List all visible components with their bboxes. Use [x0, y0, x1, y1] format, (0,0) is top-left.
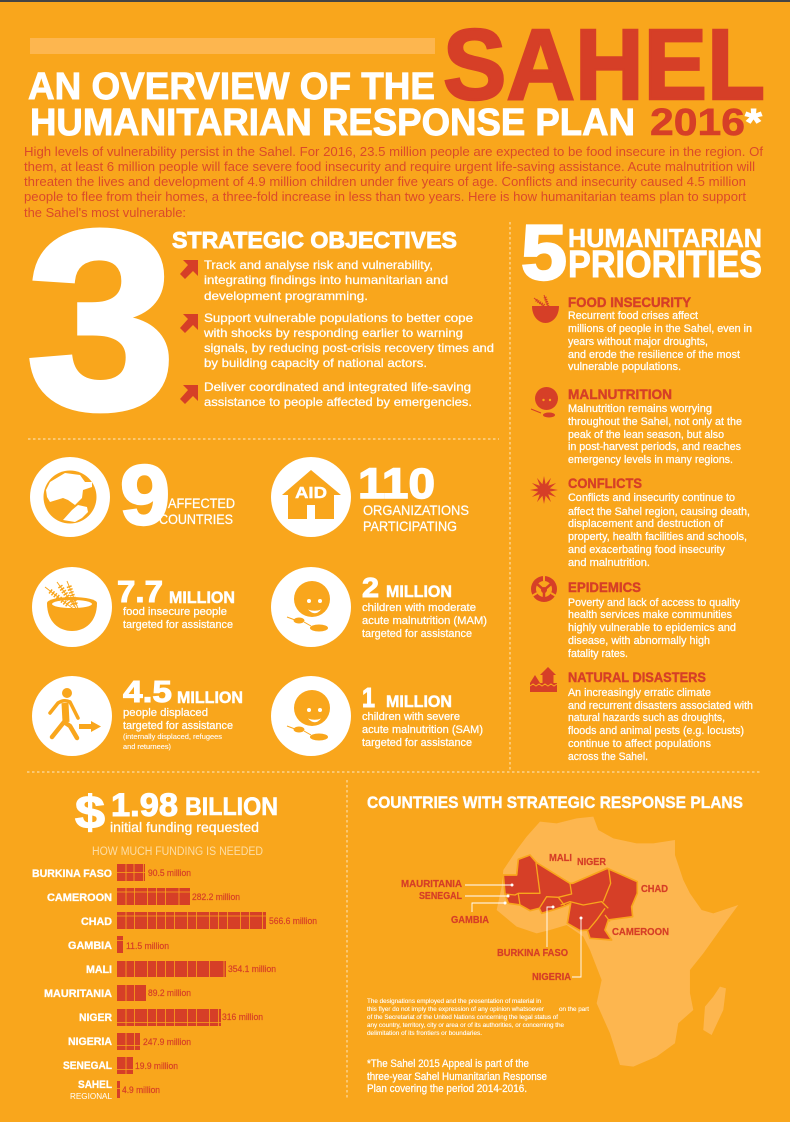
priority: malnutrition: Malnutrition remains worrying — [568, 403, 712, 415]
priority: epidemics: EPIDEMICS — [568, 579, 641, 595]
objective 2 — [180, 311, 494, 370]
title block: AN OVERVIEW OF THE — [28, 66, 435, 108]
panel: countries map — [367, 793, 743, 1095]
priority: food insecurity: millions of people in the Sahel, even in — [568, 323, 752, 335]
bar: Cameroon: CAMEROON — [47, 892, 112, 904]
disclaimer: delimitation of its frontiers or boundaries. — [367, 1030, 482, 1037]
bar: Mali — [86, 961, 276, 977]
priority: conflicts: affect the Sahel region, causing death, — [568, 506, 750, 518]
bar: Sahel regional: 4.9 million — [122, 1085, 160, 1095]
bar: Mali: 354.1 million — [228, 964, 276, 974]
priority: natural disasters: across the Sahel. — [568, 751, 648, 763]
funding headline: $ — [75, 786, 105, 838]
map labels and leader lines: SENEGAL — [419, 890, 462, 902]
big number 3: 3 — [26, 178, 176, 463]
map labels and leader lines: CHAD — [641, 883, 668, 895]
icon: flooded house — [530, 667, 557, 692]
bar: Mauritania — [44, 985, 191, 1001]
priority: natural disasters: NATURAL DISASTERS — [568, 669, 706, 685]
map labels and leader lines — [401, 852, 669, 983]
intro paragraph — [24, 145, 764, 220]
bar: Niger: 316 million — [222, 1012, 263, 1022]
bar: Mali: MALI — [86, 964, 112, 976]
priority: food insecurity — [532, 294, 752, 373]
disclaimer: of the Secretariat of the United Nations concerning the legal status of — [367, 1014, 558, 1021]
intro paragraph: people to flee from their homes, a three-fold increase in less than two years. Here is how humanitarian teams plan to support — [24, 190, 747, 204]
stat: food insecure: MILLION — [169, 588, 235, 607]
intro paragraph: High levels of vulnerability persist in the Sahel. For 2016, 23.5 million people are expected to be food insecure in the region. Of — [24, 145, 764, 159]
bar: Burkina Faso: BURKINA FASO — [32, 868, 112, 880]
bar: Burkina Faso: 90.5 million — [148, 868, 191, 878]
stat: organizations: 110 — [358, 460, 435, 508]
bar: Cameroon: 282.2 million — [192, 892, 240, 902]
intro paragraph: them, at least 6 million people will face severe food insecurity and require urgent life-saving assistance. Acute malnutrition will — [24, 160, 755, 174]
icon: child face with spoon — [271, 567, 351, 647]
stat: displaced people: and returnees) — [123, 742, 171, 751]
stat: moderate malnutrition: children with moderate — [362, 602, 476, 614]
objective 2: signals, by reducing post-crisis recovery times and — [204, 341, 494, 355]
panel: key figures — [30, 448, 487, 756]
map labels and leader lines: MAURITANIA — [401, 878, 462, 890]
heading: 5 humanitarian priorities: HUMANITARIAN — [568, 223, 762, 253]
priority: epidemics: health services make communities — [568, 609, 732, 621]
priority: conflicts — [530, 475, 750, 569]
bar: Chad: CHAD — [81, 916, 112, 928]
priority: epidemics: fatality rates. — [568, 648, 628, 660]
map labels and leader lines: CAMEROON — [612, 926, 669, 938]
priority: food insecurity: vulnerable populations. — [568, 361, 681, 373]
icon: child face with spoon — [271, 676, 351, 756]
stat: severe malnutrition — [271, 676, 483, 756]
bar: Mauritania: MAURITANIA — [44, 988, 112, 1000]
stat: severe malnutrition: children with severe — [362, 711, 460, 723]
bar: Cameroon — [47, 888, 240, 905]
priority: food insecurity: FOOD INSECURITY — [568, 294, 692, 310]
stat: moderate malnutrition: acute malnutrition (MAM) — [362, 615, 487, 627]
heading: 5 humanitarian priorities: 5 — [521, 208, 567, 296]
objective 1: development programming. — [204, 289, 368, 303]
disclaimer: any country, territory, city or area or of its authorities, or concerning the — [367, 1022, 564, 1029]
map: Africa — [497, 817, 738, 1067]
Africa landmass — [497, 817, 738, 1067]
bar: Gambia: GAMBIA — [68, 940, 112, 952]
priority: conflicts: and exacerbating food insecurity — [568, 544, 725, 556]
priority: natural disasters: An increasingly erratic climate — [568, 687, 711, 699]
objective 3: Deliver coordinated and integrated life-saving — [204, 380, 471, 394]
funding headline: BILLION — [185, 793, 278, 821]
bar chart: funding by country — [32, 864, 317, 1101]
title block: * — [745, 102, 762, 144]
map heading: COUNTRIES WITH STRATEGIC RESPONSE PLANS — [367, 793, 743, 812]
stat: affected countries: AFFECTED — [168, 495, 235, 511]
icon: aid house — [271, 457, 351, 537]
stat: moderate malnutrition: MILLION — [386, 582, 452, 601]
priority: conflicts: and malnutrition. — [568, 557, 650, 569]
stat: affected countries: 9 — [120, 448, 170, 542]
priority: conflicts: Conflicts and insecurity continue to — [568, 492, 735, 504]
footnote — [367, 1058, 547, 1095]
disclaimer: on the part — [559, 1006, 589, 1013]
bar: Gambia: 11.5 million — [126, 941, 169, 951]
objective 1: Track and analyse risk and vulnerability, — [204, 258, 433, 272]
intro paragraph: threaten the lives and development of 4.9 million children under five years of age. Conflicts and insecurity caused 4.5 million — [24, 175, 746, 189]
heading: strategic objectives: STRATEGIC OBJECTIVES — [172, 227, 457, 253]
title block: SAHEL — [443, 9, 765, 121]
objective 2: with shocks by responding earlier to warning — [203, 326, 463, 340]
stat: severe malnutrition: acute malnutrition (SAM) — [362, 724, 483, 736]
stat: food insecure: 7.7 — [117, 574, 163, 609]
bar: Senegal: 19.9 million — [135, 1061, 178, 1071]
stat: moderate malnutrition: 2 — [362, 572, 379, 603]
priority: conflicts: displacement and destruction of — [568, 518, 724, 530]
heading: 5 humanitarian priorities: PRIORITIES — [568, 244, 762, 286]
icon: explosion — [530, 476, 558, 504]
icon: biohazard — [531, 576, 557, 602]
objective 1: integrating findings into humanitarian and — [204, 273, 448, 287]
map labels and leader lines: NIGER — [577, 856, 606, 868]
bar: Niger: NIGER — [79, 1012, 112, 1024]
stat: affected countries: COUNTRIES — [159, 511, 233, 527]
stat: food insecure: targeted for assistance — [123, 619, 233, 631]
priority: natural disasters — [530, 667, 753, 763]
map labels and leader lines: MALI — [549, 852, 572, 864]
stat: organizations: PARTICIPATING — [363, 518, 457, 534]
stat: displaced people: people displaced — [123, 707, 208, 719]
priority: natural disasters: natural hazards such as droughts, — [568, 712, 725, 724]
chart subtitle: HOW MUCH FUNDING IS NEEDED — [92, 846, 263, 858]
priority: malnutrition: MALNUTRITION — [568, 386, 672, 402]
panel: funding — [32, 786, 317, 1101]
stat: severe malnutrition: MILLION — [386, 692, 452, 711]
priority: malnutrition: throughout the Sahel, not only at the — [568, 416, 742, 428]
bar: Nigeria: NIGERIA — [68, 1036, 112, 1048]
stat: organizations — [271, 457, 469, 537]
stat: severe malnutrition: 1 — [362, 682, 375, 713]
footnote: Plan covering the period 2014-2016. — [367, 1083, 527, 1095]
stat: organizations: ORGANIZATIONS — [363, 502, 469, 518]
objective 3 — [180, 380, 472, 409]
priority: epidemics: Poverty and lack of access to quality — [568, 597, 740, 609]
priority: epidemics — [531, 576, 740, 660]
stat: severe malnutrition: targeted for assistance — [362, 737, 472, 749]
stat: displaced people — [32, 674, 243, 756]
priority: epidemics: disease, with abnormally high — [568, 635, 710, 647]
stat: displaced people: targeted for assistance — [123, 720, 233, 732]
stat: moderate malnutrition: targeted for assistance — [362, 628, 472, 640]
bar: Senegal — [63, 1057, 178, 1074]
panel: humanitarian priorities — [521, 208, 762, 763]
icon: globe — [30, 457, 110, 537]
footnote: three-year Sahel Humanitarian Response — [367, 1071, 547, 1083]
objective 1 — [180, 258, 448, 303]
objective 2: by building capacity of national actors. — [204, 356, 427, 370]
footnote: *The Sahel 2015 Appeal is part of the — [367, 1058, 529, 1070]
bar: Sahel regional — [70, 1079, 160, 1101]
title block — [28, 9, 765, 144]
bar: Senegal: SENEGAL — [63, 1060, 112, 1072]
intro paragraph: the Sahel's most vulnerable: — [24, 206, 186, 220]
map labels and leader lines: GAMBIA — [451, 914, 489, 926]
priority: natural disasters: and recurrent disasters associated with — [568, 700, 753, 712]
icon: wheat bowl — [532, 295, 559, 323]
bar: Chad: 566.6 million — [269, 916, 317, 926]
icon: walking person with arrow — [32, 676, 112, 756]
priority: malnutrition: peak of the lean season, but also — [568, 429, 724, 441]
bar: Burkina Faso — [32, 864, 191, 881]
title block: 2016 — [650, 102, 745, 144]
stat: displaced people: MILLION — [177, 688, 243, 707]
funding headline — [75, 786, 278, 838]
map labels and leader lines: NIGERIA — [532, 971, 571, 983]
bar: Niger — [79, 1009, 263, 1026]
priority: epidemics: highly vulnerable to epidemics and — [568, 622, 736, 634]
bar: Nigeria — [68, 1033, 191, 1050]
stat: moderate malnutrition — [271, 567, 487, 647]
priority: food insecurity: years without major droughts, — [568, 336, 708, 348]
panel: strategic objectives — [26, 178, 494, 463]
heading: 5 humanitarian priorities — [521, 208, 762, 296]
title block: HUMANITARIAN RESPONSE PLAN — [30, 102, 635, 144]
funding headline: initial funding requested — [110, 819, 259, 835]
stat: displaced people: 4.5 — [123, 674, 172, 709]
priority: conflicts: property, health facilities and schools, — [568, 531, 747, 543]
icon: aid house: AID — [295, 485, 327, 502]
Sahel countries — [503, 855, 637, 940]
priority: malnutrition: in post-harvest periods, and reaches — [568, 441, 741, 453]
priority: natural disasters: continue to affect populations — [568, 738, 711, 750]
stat: food insecure — [32, 567, 235, 647]
disclaimer — [367, 998, 589, 1037]
bar: Sahel regional: REGIONAL — [70, 1092, 113, 1101]
bar: Nigeria: 247.9 million — [143, 1037, 191, 1047]
priority: food insecurity: Recurrent food crises affect — [568, 310, 698, 322]
bar: Gambia — [68, 936, 169, 953]
icon: face — [531, 387, 558, 418]
objective 3: assistance to people affected by emergencies. — [204, 395, 472, 409]
stat: affected countries — [30, 448, 235, 542]
stat: displaced people: (internally displaced, refugees — [123, 732, 222, 741]
priority: malnutrition: emergency levels in many regions. — [568, 454, 733, 466]
map labels and leader lines: BURKINA FASO — [497, 947, 568, 959]
priority: natural disasters: floods and animal pests (e.g. locusts) — [568, 725, 744, 737]
funding headline: 1.98 — [111, 787, 178, 823]
disclaimer: this flyer do not imply the expression of any opinion whatsoever — [367, 1006, 545, 1013]
priority: food insecurity: and erode the resilience of the most — [568, 349, 740, 361]
bar: Chad — [81, 912, 317, 929]
disclaimer: The designations employed and the presentation of material in — [367, 998, 541, 1005]
bar: Sahel regional: SAHEL — [78, 1079, 112, 1091]
priority: conflicts: CONFLICTS — [568, 475, 642, 491]
priority: malnutrition — [531, 386, 742, 466]
bar: Mauritania: 89.2 million — [148, 988, 191, 998]
icon: wheat bowl — [32, 567, 112, 647]
stat: food insecure: food insecure people — [123, 606, 227, 618]
objective 2: Support vulnerable populations to better cope — [204, 311, 473, 325]
